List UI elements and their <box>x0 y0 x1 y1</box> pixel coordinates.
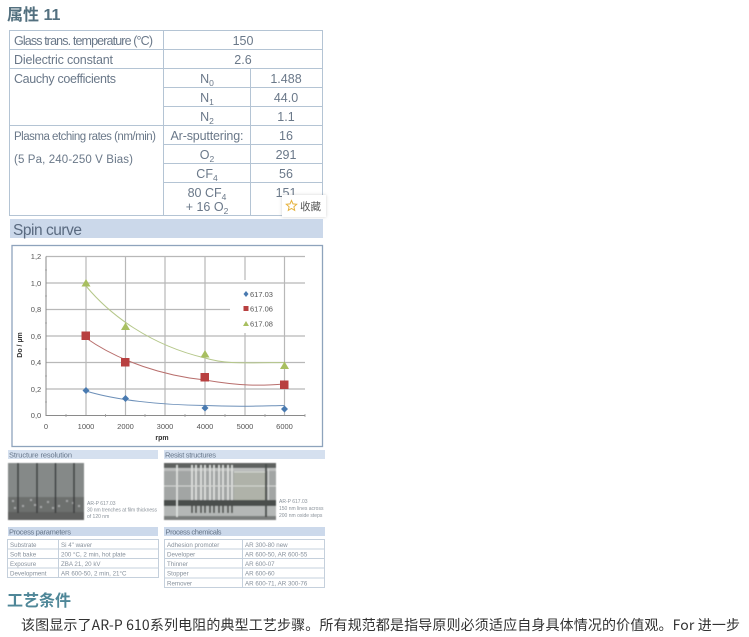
row: plasma etching rates: 151 <box>276 186 296 200</box>
row: cauchy coefficients: 1.488 <box>270 72 302 86</box>
row: plasma etching rates: 56 <box>279 167 293 181</box>
heading: structure resolution: Structure resolution <box>9 450 72 460</box>
heading: process parameters <box>8 527 158 536</box>
row: cauchy coefficients: Cauchy coefficients <box>14 72 116 86</box>
legend: 617.03 <box>250 290 273 299</box>
row: cauchy coefficients: 0 <box>209 78 214 88</box>
caption: resist structures: 200 nm oxide steps <box>279 513 323 519</box>
row: plasma etching rates: (5 Pa, 240-250 V Bias) <box>14 154 133 166</box>
row: plasma etching rates: CF <box>196 167 213 181</box>
row: cauchy coefficients: 44.0 <box>274 91 298 105</box>
row: cauchy coefficients: N <box>200 91 209 105</box>
row: dielectric constant: 2.6 <box>234 53 252 67</box>
row: cauchy coefficients <box>14 72 302 126</box>
SEM image: trenches <box>8 463 84 520</box>
y axis labels: 0,0 <box>31 411 41 420</box>
caption: resist structures: AR-P 617.03 <box>279 499 308 505</box>
row: plasma etching rates <box>14 129 296 216</box>
row: dielectric constant <box>14 53 252 67</box>
heading: structure resolution <box>8 450 158 460</box>
caption: trenches: 30 nm trenches at film thickness <box>87 508 158 514</box>
heading: process parameters: Process parameters <box>9 528 71 536</box>
row: plasma etching rates: Ar-sputtering: <box>170 129 244 143</box>
y axis labels <box>31 252 41 420</box>
x axis labels: 2000 <box>117 422 134 431</box>
title: 属性 11 <box>7 5 60 24</box>
properties table <box>10 30 322 216</box>
series 617.08 <box>82 279 289 369</box>
legend: 617.06 <box>250 304 273 314</box>
row: dielectric constant: Dielectric constant <box>14 53 114 67</box>
process parameters table: Development <box>10 570 47 578</box>
x axis labels: 3000 <box>157 422 173 431</box>
row: glass transition: Glass trans. temperature (°C) <box>14 34 153 48</box>
process chemicals table: Developer <box>167 552 195 558</box>
process chemicals table <box>164 540 324 588</box>
x axis title: rpm <box>155 435 169 442</box>
caption: trenches: AR-P 617.03 <box>87 501 116 507</box>
y axis labels: 1,0 <box>31 279 41 288</box>
caption: trenches <box>87 501 158 520</box>
process chemicals table: AR 600-07 <box>245 561 275 568</box>
x axis labels: 5000 <box>237 422 253 431</box>
row: cauchy coefficients: 1.1 <box>277 110 295 124</box>
process parameters table: Si 4" waver <box>61 542 92 549</box>
caption: resist structures: 150 nm lines across <box>279 506 324 512</box>
row: glass transition: 150 <box>233 34 253 48</box>
row: cauchy coefficients: N <box>200 72 209 86</box>
y axis labels: 0,2 <box>31 385 41 394</box>
row: plasma etching rates: 4 <box>222 192 227 202</box>
series 617.06 <box>82 332 288 389</box>
row: cauchy coefficients: 1 <box>209 97 214 107</box>
row: cauchy coefficients: N <box>200 110 209 124</box>
process chemicals table: Stopper <box>167 570 189 578</box>
heading: process chemicals <box>164 527 325 536</box>
heading: spin curve: Spin curve <box>13 222 82 239</box>
y axis labels: 0,4 <box>31 358 41 367</box>
row: glass transition <box>14 34 253 48</box>
process parameters table <box>8 540 158 578</box>
favorite button <box>282 195 326 217</box>
legend: 617.08 <box>250 320 273 328</box>
process parameters table: 200 °C, 2 min, hot plate <box>61 552 126 558</box>
process chemicals table: Remover <box>167 580 192 588</box>
y axis labels: 1,2 <box>31 252 41 261</box>
process parameters table: Soft bake <box>10 552 37 558</box>
heading: resist structures <box>164 450 325 460</box>
icon: star <box>286 200 297 210</box>
row: plasma etching rates: + 16 O <box>186 200 224 214</box>
process parameters table: Exposure <box>10 561 37 568</box>
x axis labels <box>44 422 293 431</box>
row: plasma etching rates: 80 CF <box>188 186 222 200</box>
x axis labels: 6000 <box>276 422 293 431</box>
caption: resist structures <box>279 499 324 519</box>
heading: spin curve <box>10 219 323 239</box>
row: plasma etching rates: 2 <box>224 206 229 216</box>
SEM image: resist structures <box>164 463 276 520</box>
y axis title: Do / µm <box>17 332 24 358</box>
process chemicals table: Adhesion promoter <box>167 542 219 549</box>
x axis labels: 0 <box>44 422 48 431</box>
process parameters table: Substrate <box>10 542 37 549</box>
heading: resist structures: Resist structures <box>165 450 216 460</box>
row: plasma etching rates: 291 <box>276 148 296 162</box>
favorite button: 收藏 <box>300 200 321 213</box>
row: cauchy coefficients: 2 <box>209 116 214 126</box>
series 617.03 <box>82 387 288 412</box>
y axis labels: 0,6 <box>31 332 41 341</box>
process chemicals table: AR 600-71, AR 300-76 <box>245 580 308 588</box>
row: plasma etching rates: 16 <box>279 129 293 143</box>
process parameters table: ZBA 21, 20 kV <box>61 561 101 568</box>
x axis labels: 4000 <box>197 422 213 431</box>
spin curve chart <box>12 246 322 446</box>
heading: process chemicals: Process chemicals <box>166 528 222 536</box>
legend <box>241 286 277 330</box>
x axis labels: 1000 <box>78 422 94 431</box>
process chemicals table: AR 600-60 <box>245 570 275 578</box>
process chemicals table: Thinner <box>167 561 188 568</box>
row: plasma etching rates: 2 <box>210 154 214 164</box>
body text: 该图显示了AR-P 610系列电阻的典型工艺步骤。所有规范都是指导原则必须适应自身具体情况的价值观。For 进一步 <box>21 615 740 635</box>
row: plasma etching rates: Plasma etching rates (nm/min) <box>14 131 156 143</box>
heading: process conditions: 工艺条件 <box>7 587 71 611</box>
row: plasma etching rates: 4 <box>213 173 218 183</box>
caption: trenches: of 120 nm <box>87 514 109 520</box>
process chemicals table: AR 300-80 new <box>245 542 288 549</box>
row: plasma etching rates: O <box>200 148 210 162</box>
process parameters table: AR 600-50, 2 min, 21°C <box>61 570 127 578</box>
process chemicals table: AR 600-50, AR 600-55 <box>245 552 308 558</box>
y axis labels: 0,8 <box>31 305 41 314</box>
